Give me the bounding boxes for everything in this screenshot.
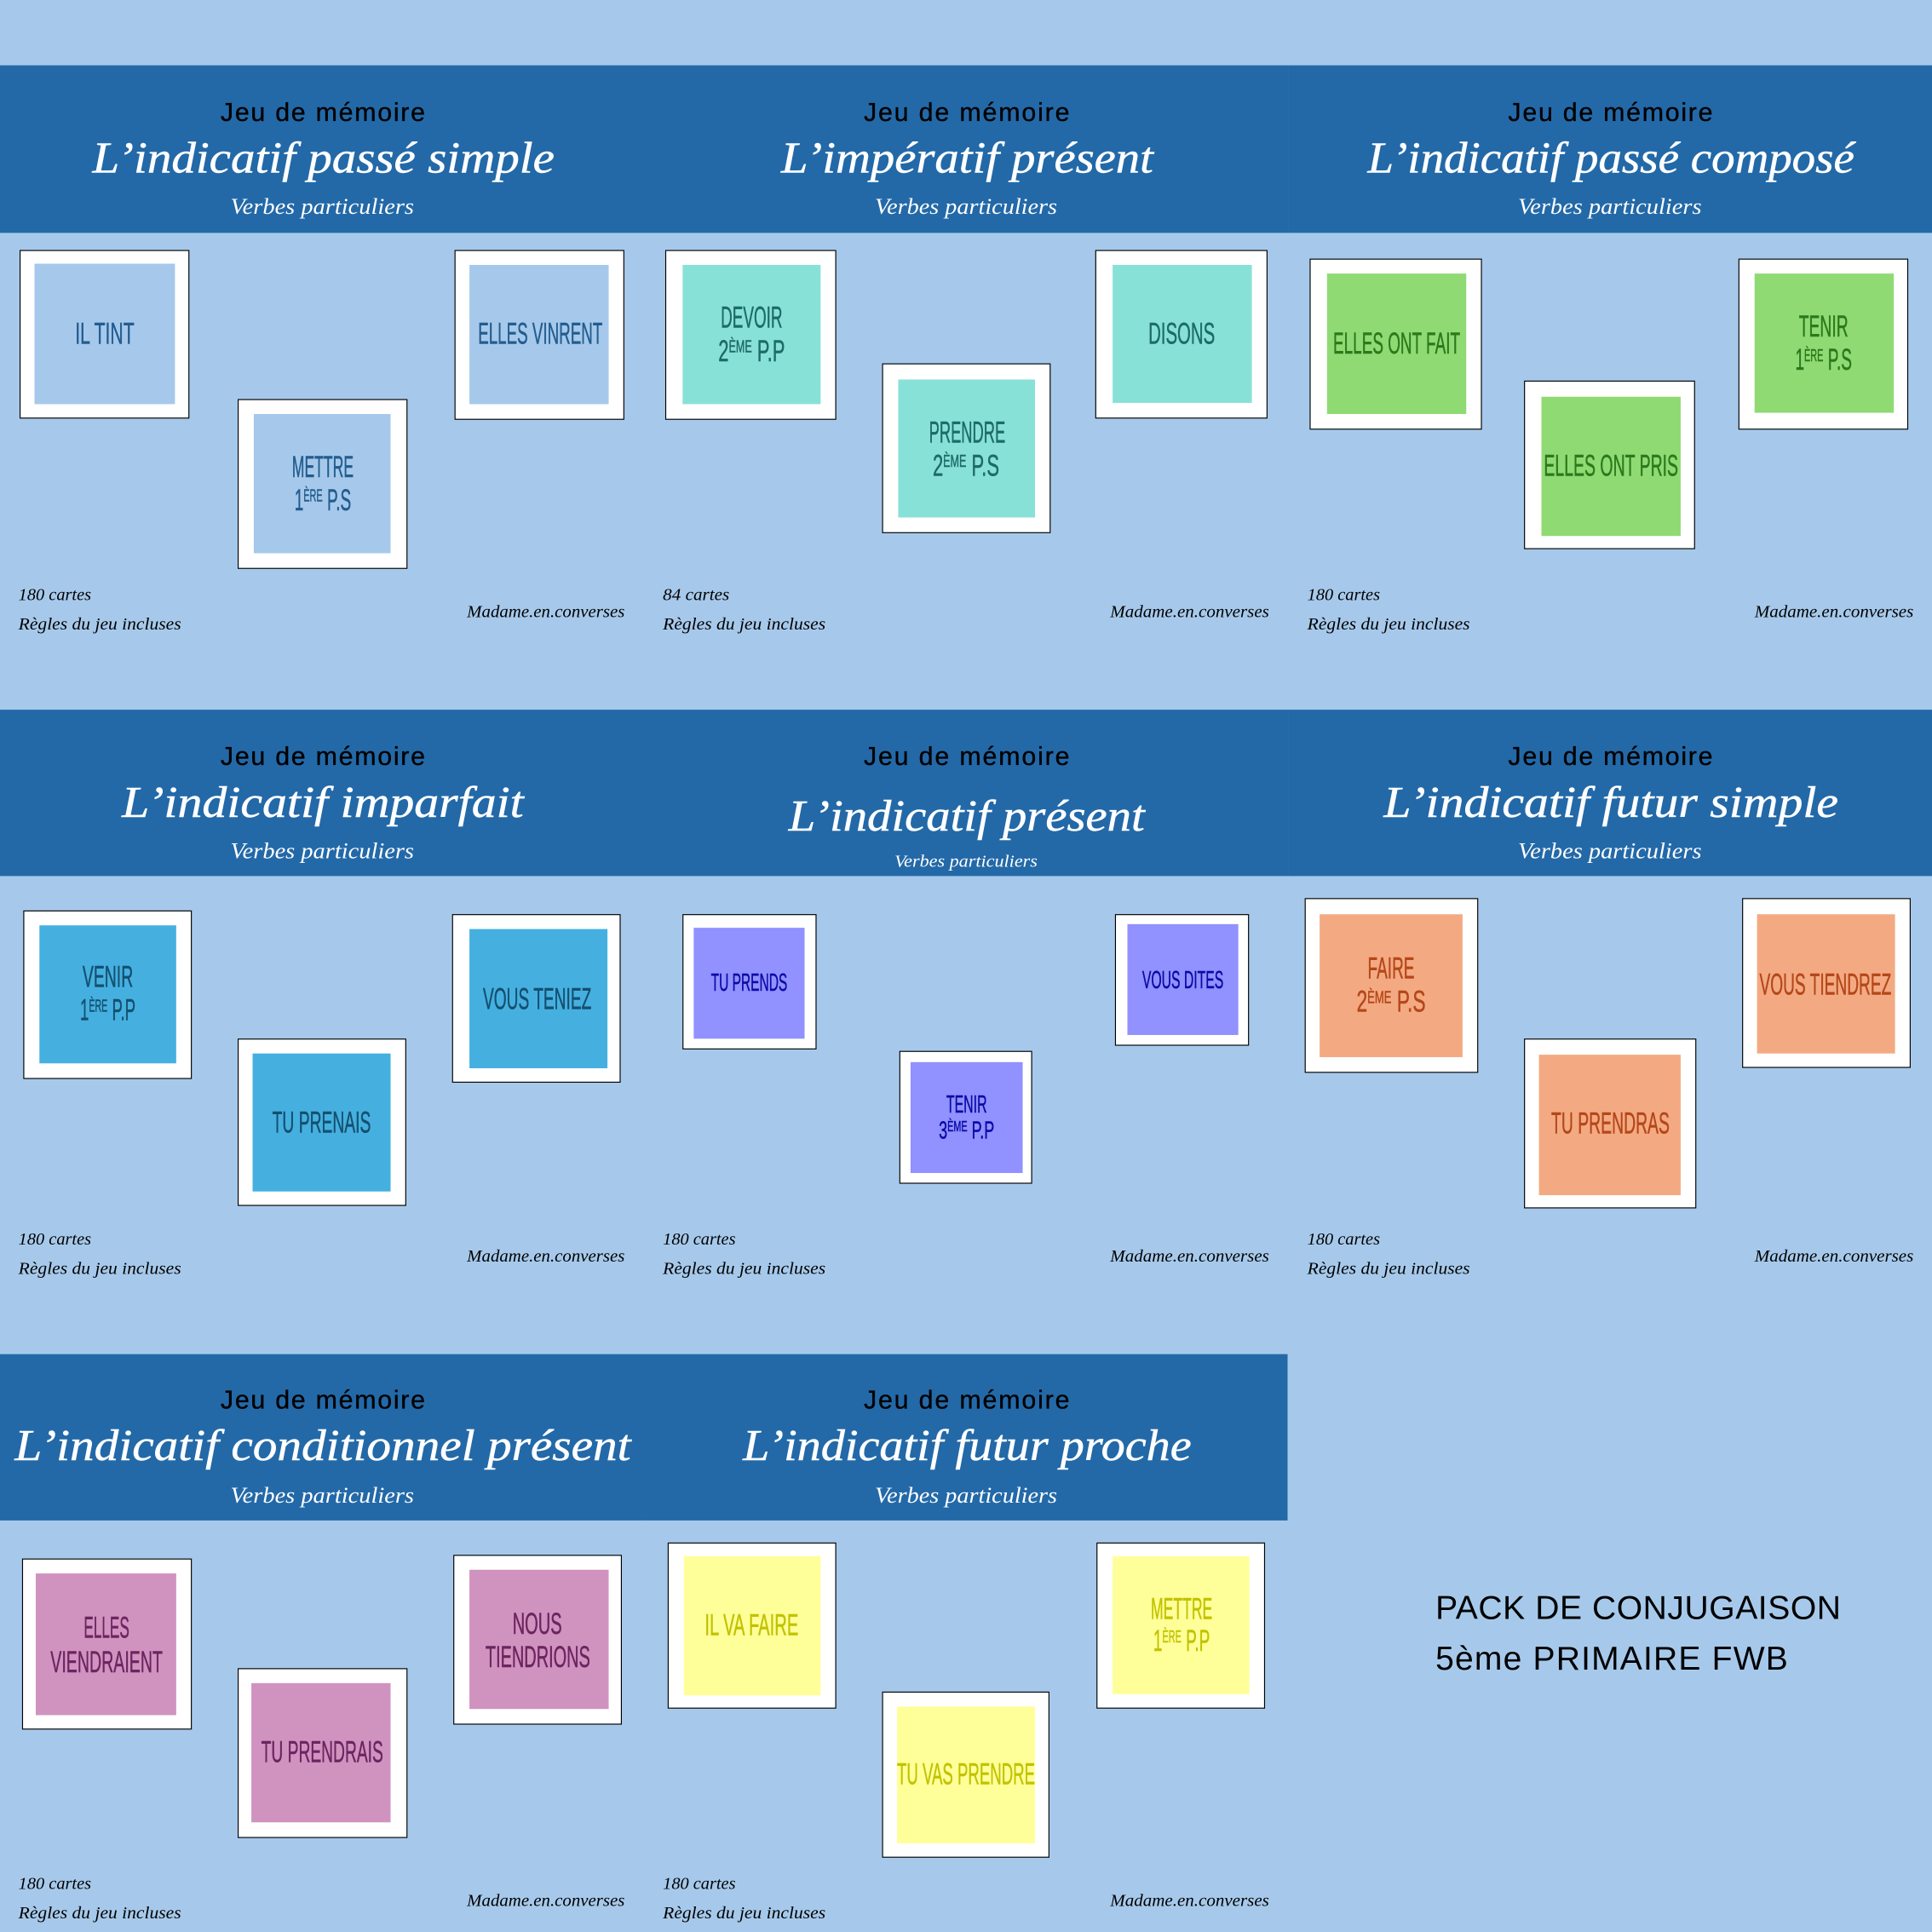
card: tenir: TENIR (1799, 309, 1849, 343)
footer: card count: 180 cartes (19, 1874, 91, 1893)
card: venir: 1 (80, 993, 97, 1027)
card: tu prenais: TU PRENAIS (273, 1105, 371, 1139)
card: prendre: ÈME (943, 451, 966, 471)
card: mettre: 1 (1153, 1624, 1170, 1658)
footer: card count: 180 cartes (1308, 1230, 1380, 1249)
subtitle: Verbes particuliers (230, 1483, 414, 1508)
card: elles vinrent: ELLES VINRENT (478, 317, 602, 351)
title: L’indicatif présent (788, 792, 1146, 841)
card: vous dites (1115, 915, 1249, 1045)
card: tenir (1739, 259, 1908, 429)
card: venir (24, 911, 192, 1078)
card: venir: P.P (107, 993, 135, 1027)
pack title: 5ème PRIMAIRE FWB (1435, 1641, 1788, 1677)
card: nous tiendrions: NOUS (513, 1607, 562, 1641)
footer: rules: Règles du jeu incluses (18, 1904, 181, 1923)
subtitle: Verbes particuliers (1518, 194, 1702, 219)
title: L’indicatif imparfait (121, 779, 525, 827)
card: faire: FAIRE (1368, 951, 1414, 985)
card: elles ont pris (1525, 381, 1694, 549)
card: nous tiendrions: TIENDRIONS (486, 1640, 590, 1674)
card: il va faire: IL VA FAIRE (704, 1607, 798, 1642)
card: elles vinrent (455, 250, 624, 419)
panel: impératif présent (644, 66, 1289, 634)
heading: jeu de mémoire: Jeu de mémoire (221, 99, 425, 127)
card: tu vas prendre: TU VAS PRENDRE (897, 1757, 1035, 1791)
card: faire (1305, 899, 1478, 1072)
card: tenir: TENIR (946, 1091, 987, 1118)
card: il va faire (668, 1543, 836, 1708)
card: tu prendras (1525, 1039, 1696, 1208)
card: mettre: ÈRE (1162, 1627, 1182, 1647)
heading: jeu de mémoire: Jeu de mémoire (221, 743, 425, 771)
header band (0, 66, 644, 233)
card: venir: ÈRE (89, 997, 107, 1016)
card: devoir: DEVOIR (721, 301, 782, 335)
card: mettre: ÈRE (303, 486, 323, 506)
card: tu prendrais (239, 1669, 407, 1837)
footer: rules: Règles du jeu incluses (662, 1260, 825, 1279)
card: mettre: METTRE (1151, 1592, 1212, 1626)
footer: author: Madame.en.converses (466, 1892, 624, 1911)
card: devoir: P.P (752, 334, 785, 368)
footer: author: Madame.en.converses (1109, 1892, 1269, 1911)
card: tenir: P.P (968, 1118, 994, 1145)
card: tu prendras: TU PRENDRAS (1551, 1107, 1670, 1141)
card: mettre (239, 400, 407, 568)
card: tenir: ÈRE (1804, 346, 1823, 365)
card: elles ont fait (1310, 259, 1481, 429)
title: L’indicatif passé composé (1366, 134, 1856, 182)
footer: card count: 84 cartes (663, 585, 729, 604)
card: faire: P.S (1391, 985, 1426, 1019)
panel: imparfait (0, 710, 644, 1279)
header band (0, 1354, 644, 1521)
panel: passé simple (0, 66, 644, 634)
card: il tint (20, 250, 189, 418)
card: elles ont fait: ELLES ONT FAIT (1333, 326, 1460, 360)
card: prendre: P.S (966, 448, 999, 482)
footer: card count: 180 cartes (19, 1230, 91, 1249)
title: L’indicatif futur simple (1383, 779, 1838, 827)
panel: passé composé (1289, 66, 1932, 634)
heading: jeu de mémoire: Jeu de mémoire (864, 1386, 1070, 1414)
card: mettre (1097, 1543, 1264, 1708)
card: nous tiendrions (454, 1555, 621, 1724)
footer: rules: Règles du jeu incluses (1307, 1260, 1470, 1279)
card: tenir: P.S (1823, 342, 1852, 377)
card: tu prends (683, 915, 816, 1049)
subtitle: Verbes particuliers (875, 194, 1057, 219)
title: L’indicatif passé simple (91, 134, 555, 182)
footer: rules: Règles du jeu incluses (1307, 615, 1470, 634)
header band (0, 710, 644, 876)
panel: conditionnel présent (0, 1354, 644, 1923)
card: mettre: P.S (323, 483, 351, 517)
card: elles viendraient: VIENDRAIENT (50, 1645, 163, 1679)
heading: jeu de mémoire: Jeu de mémoire (864, 743, 1070, 771)
card: prendre: PRENDRE (929, 415, 1005, 449)
title: L’indicatif conditionnel présent (14, 1422, 632, 1470)
card: devoir: 2 (718, 334, 735, 368)
panel: futur simple (1289, 710, 1932, 1279)
card: disons (1095, 250, 1267, 418)
card: vous teniez: VOUS TENIEZ (483, 982, 591, 1016)
card: elles ont pris: ELLES ONT PRIS (1544, 448, 1678, 482)
card: tu prends: TU PRENDS (711, 969, 787, 997)
card: vous teniez (452, 915, 620, 1082)
pack title: PACK DE CONJUGAISON (1435, 1590, 1841, 1627)
card: vous tiendrez (1743, 899, 1910, 1067)
footer: card count: 180 cartes (1308, 585, 1380, 604)
card: venir: VENIR (83, 960, 133, 994)
card: devoir (666, 250, 836, 419)
card: prendre (883, 364, 1050, 532)
footer: card count: 180 cartes (663, 1874, 736, 1893)
card: mettre: 1 (295, 483, 311, 517)
pack title (1435, 1590, 1841, 1677)
footer: card count: 180 cartes (663, 1230, 736, 1249)
header band (644, 710, 1289, 876)
card: prendre: 2 (933, 448, 950, 482)
footer: author: Madame.en.converses (1754, 1247, 1913, 1266)
card: tu prendrais: TU PRENDRAIS (262, 1734, 383, 1768)
card: tenir: 1 (1795, 342, 1812, 377)
title: L’indicatif futur proche (742, 1422, 1192, 1470)
card: mettre: METTRE (292, 450, 354, 484)
card: vous dites: VOUS DITES (1142, 967, 1223, 994)
footer: rules: Règles du jeu incluses (662, 1904, 825, 1923)
card: tu prenais (239, 1039, 405, 1205)
footer: rules: Règles du jeu incluses (18, 1260, 181, 1279)
subtitle: Verbes particuliers (230, 194, 414, 219)
card: devoir: ÈME (728, 337, 752, 357)
subtitle: Verbes particuliers (1518, 838, 1702, 863)
subtitle: Verbes particuliers (894, 853, 1038, 871)
heading: jeu de mémoire: Jeu de mémoire (1508, 99, 1713, 127)
card: il tint: IL TINT (75, 317, 135, 351)
panel: présent (644, 710, 1289, 1279)
subtitle: Verbes particuliers (875, 1483, 1057, 1508)
heading: jeu de mémoire: Jeu de mémoire (1508, 743, 1713, 771)
footer: card count: 180 cartes (19, 585, 91, 604)
card: elles viendraient (22, 1559, 192, 1729)
card: tu vas prendre (883, 1692, 1049, 1857)
card: tenir: ÈME (947, 1118, 968, 1135)
heading: jeu de mémoire: Jeu de mémoire (864, 99, 1070, 127)
footer: author: Madame.en.converses (466, 603, 624, 622)
footer: author: Madame.en.converses (1109, 1247, 1269, 1266)
title: L’impératif présent (780, 134, 1155, 182)
header band (1289, 66, 1932, 233)
panel: futur proche (644, 1354, 1288, 1923)
footer: author: Madame.en.converses (1109, 603, 1269, 622)
footer: author: Madame.en.converses (466, 1247, 624, 1266)
card: elles viendraient: ELLES (83, 1610, 129, 1644)
card: tenir (900, 1051, 1032, 1183)
heading: jeu de mémoire: Jeu de mémoire (221, 1386, 425, 1414)
header band (644, 66, 1289, 233)
card: mettre: P.P (1182, 1624, 1210, 1658)
header band (644, 1354, 1288, 1521)
subtitle: Verbes particuliers (230, 838, 414, 863)
card: faire: 2 (1357, 985, 1373, 1019)
footer: rules: Règles du jeu incluses (662, 615, 825, 634)
header band (1289, 710, 1932, 876)
footer: author: Madame.en.converses (1754, 603, 1913, 622)
card: disons: DISONS (1148, 317, 1215, 351)
footer: rules: Règles du jeu incluses (18, 615, 181, 634)
card: faire: ÈME (1367, 987, 1391, 1007)
card: tenir: 3 (939, 1118, 952, 1145)
